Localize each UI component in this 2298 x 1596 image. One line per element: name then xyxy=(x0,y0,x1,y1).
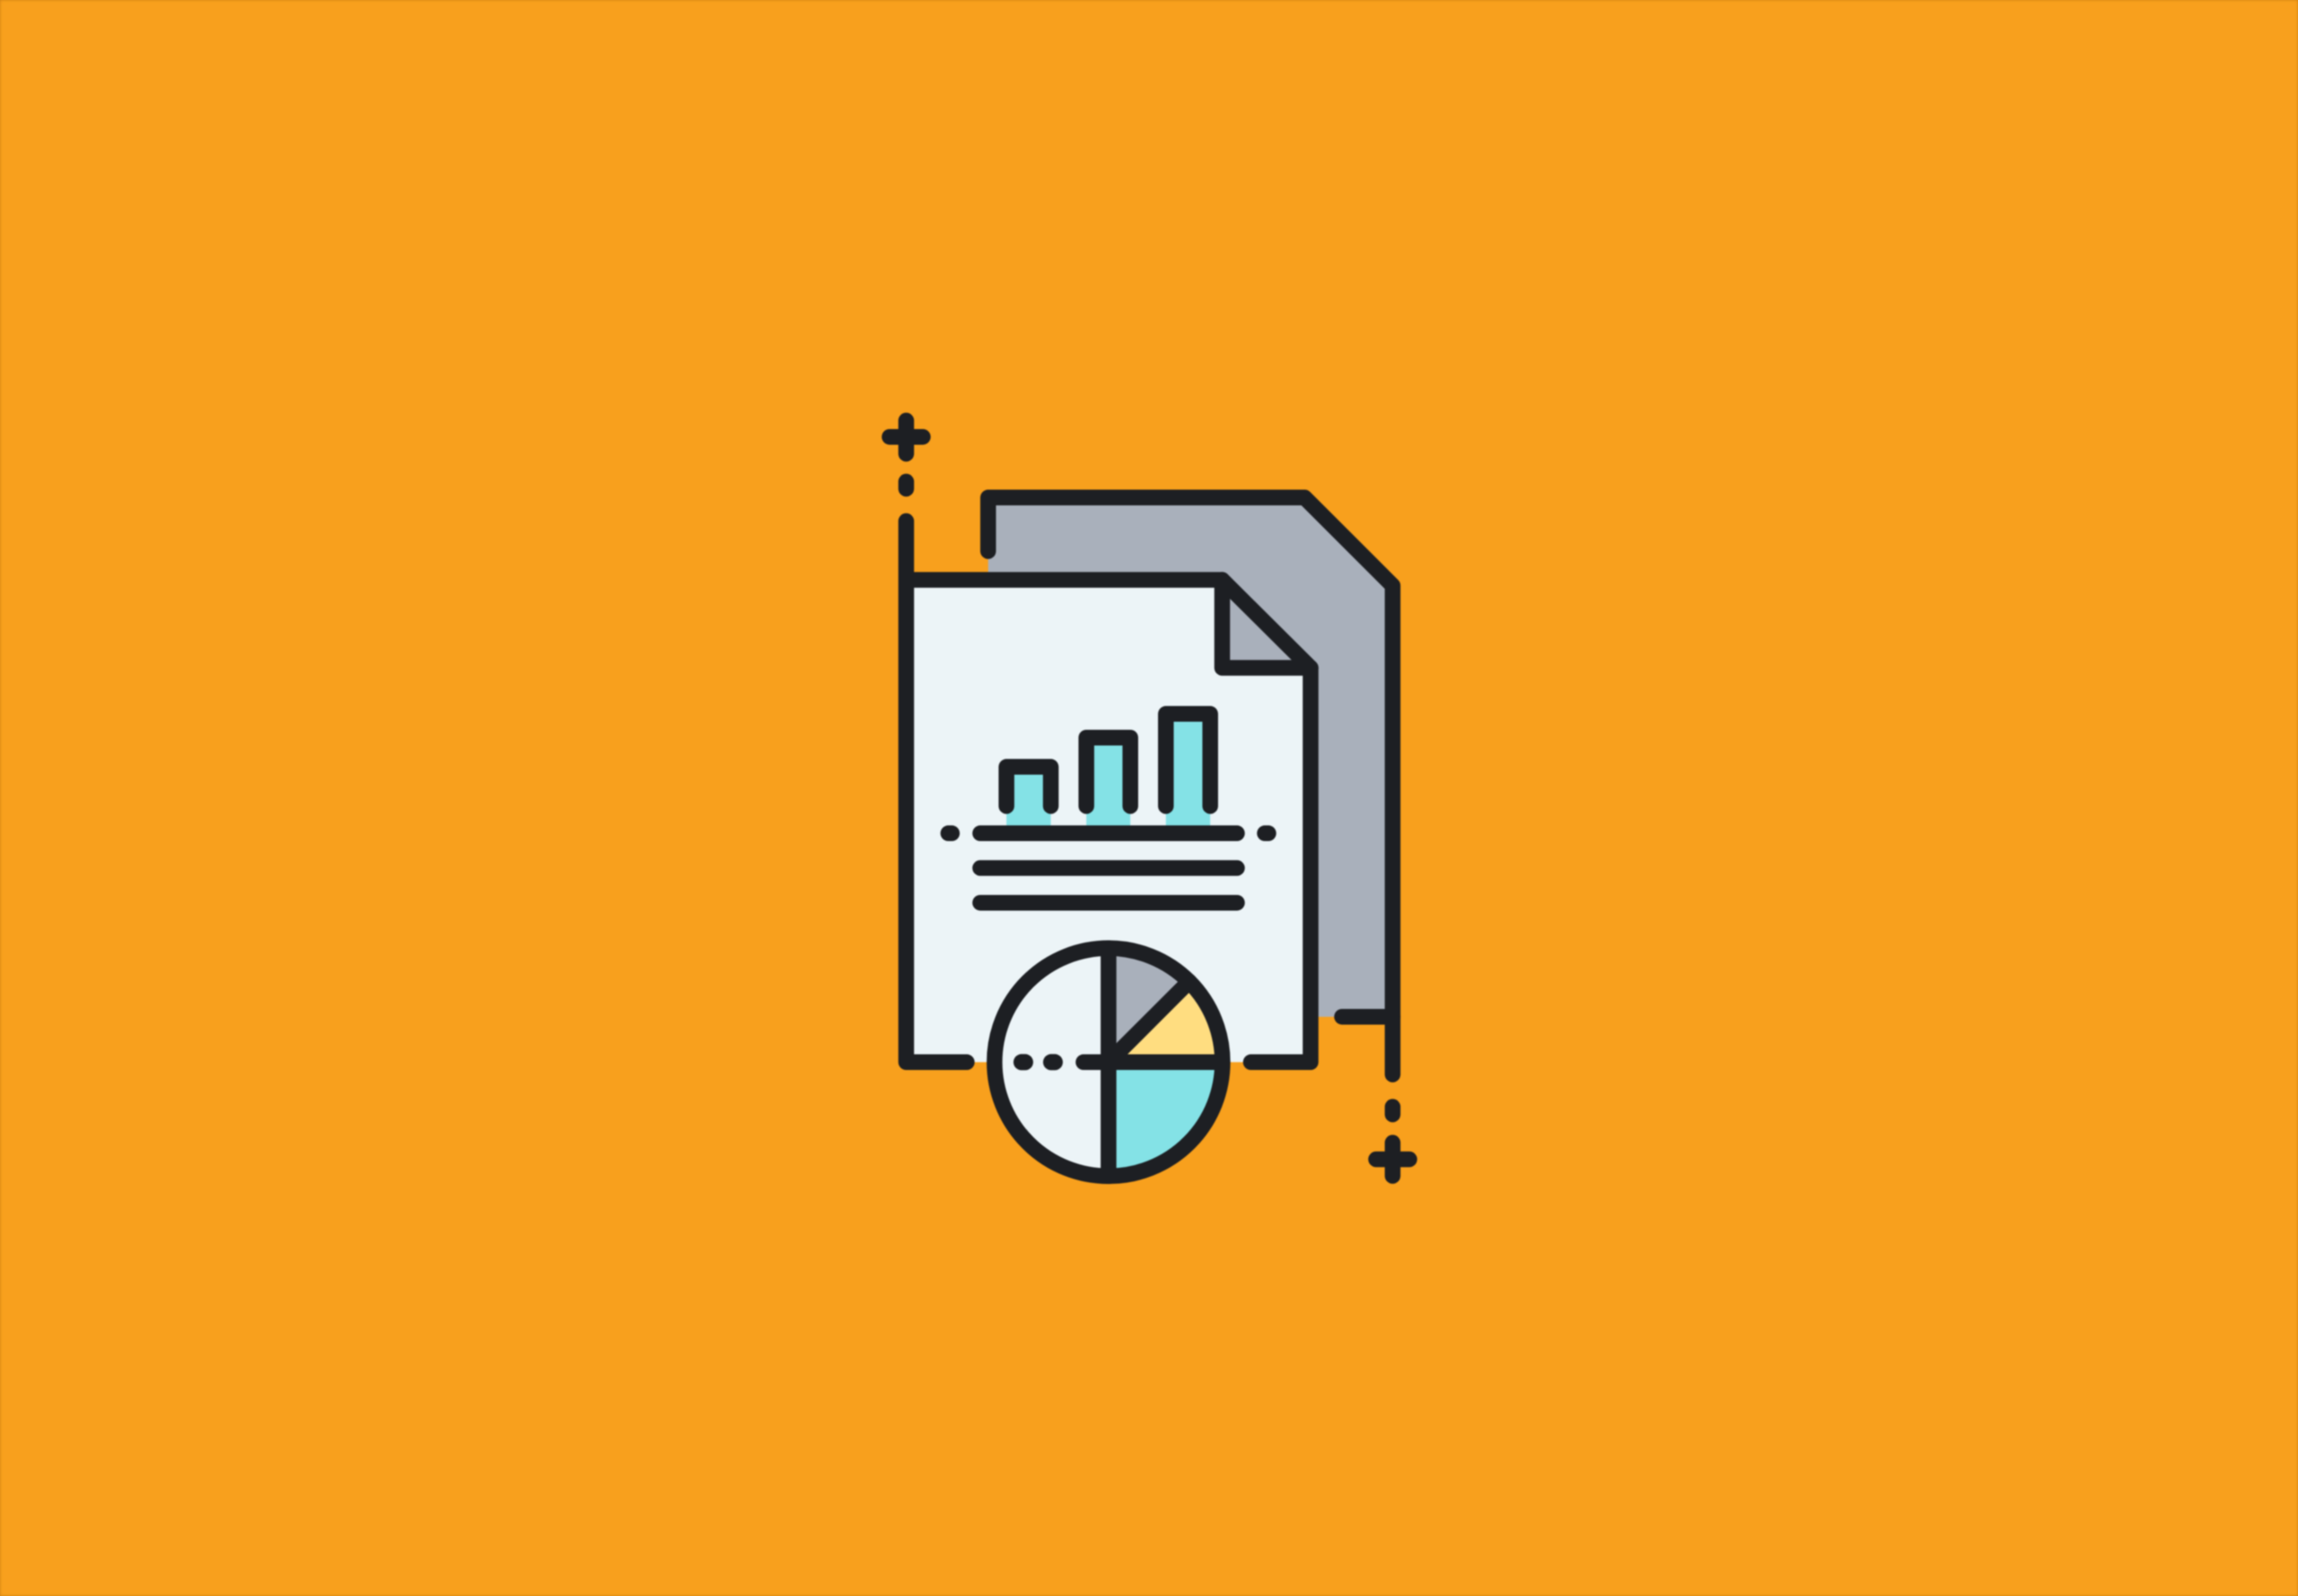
bar chart xyxy=(1006,714,1210,833)
pie slice: grey xyxy=(1109,948,1189,1062)
bar 3 xyxy=(1166,714,1210,833)
pie chart xyxy=(995,948,1223,1176)
icon: plus bottom right xyxy=(1376,1107,1409,1176)
back sheet xyxy=(988,497,1392,1074)
pie slice: yellow xyxy=(1109,982,1223,1062)
front sheet xyxy=(907,521,1311,1062)
folded corner xyxy=(1223,580,1311,668)
illustration xyxy=(890,420,1409,1176)
text lines xyxy=(948,833,1268,903)
bar 2 xyxy=(1086,738,1130,833)
bar 1 xyxy=(1006,767,1051,833)
icon: plus top left xyxy=(890,420,923,488)
pie slice: teal xyxy=(1109,1062,1223,1176)
